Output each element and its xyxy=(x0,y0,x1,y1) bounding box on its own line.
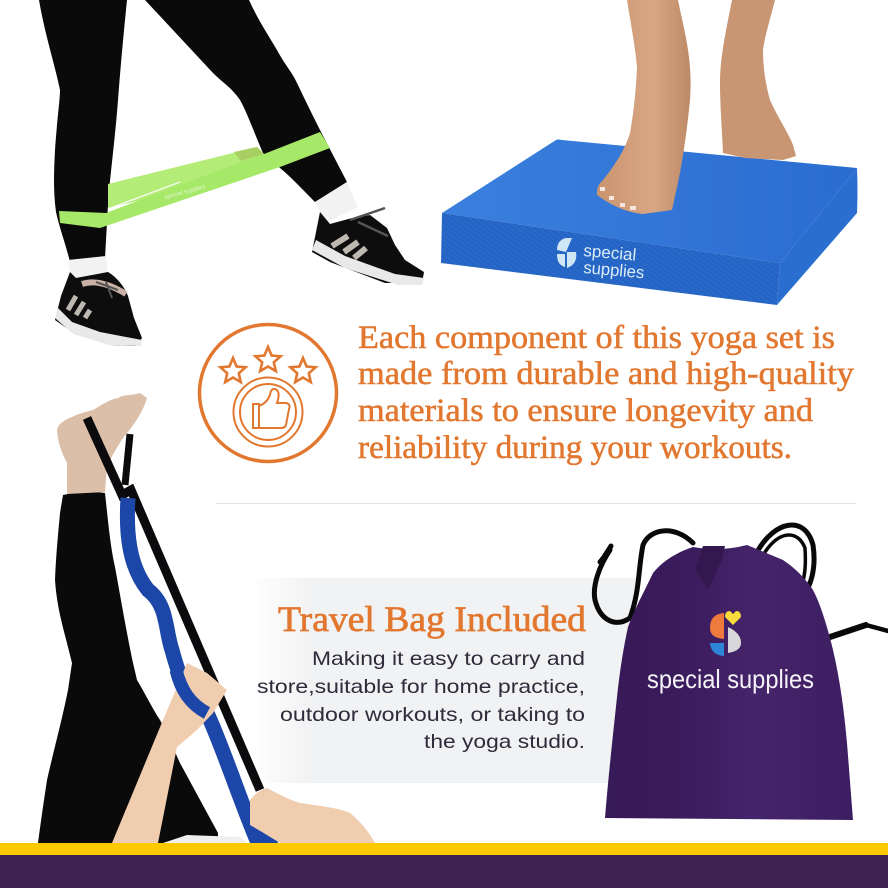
toenails xyxy=(600,189,636,208)
panel: travel bag xyxy=(250,578,636,783)
balance pad front xyxy=(441,213,780,305)
bag gather xyxy=(695,546,725,590)
photo: drawstring bag xyxy=(594,525,888,820)
green resistance band: special supplies xyxy=(164,184,206,201)
divider xyxy=(216,503,856,504)
back foot xyxy=(720,0,796,160)
icon: rating thumbs up xyxy=(200,324,336,462)
balance pad top xyxy=(442,140,857,263)
left sock xyxy=(68,256,108,284)
right shoe xyxy=(312,208,424,285)
blue strap xyxy=(127,498,278,842)
bag body xyxy=(605,545,853,820)
black strap xyxy=(87,418,260,790)
balance pad side xyxy=(777,168,858,305)
yellow stripe xyxy=(0,843,888,855)
text: durability statement: made from durable and high-quality xyxy=(358,356,855,392)
bag logo xyxy=(710,611,741,656)
green resistance band xyxy=(59,132,330,228)
bag brand text: special supplies xyxy=(647,664,814,694)
text: travel bag description: the yoga studio. xyxy=(424,731,585,753)
text: travel bag description: Making it easy to carry and xyxy=(312,648,585,670)
purple footer xyxy=(0,855,888,888)
right sock xyxy=(315,182,358,222)
photo: balance pad and feet xyxy=(441,0,858,305)
left legging xyxy=(39,0,127,263)
lower hand xyxy=(250,788,375,843)
text: travel bag description xyxy=(257,648,585,753)
text: durability statement: Each component of this yoga set is xyxy=(358,320,835,356)
text: durability statement: reliability during your workouts. xyxy=(358,430,792,466)
strap return xyxy=(125,434,130,485)
pad logo: supplies xyxy=(583,258,645,282)
text: travel bag description: outdoor workouts, or taking to xyxy=(280,704,585,726)
right legging xyxy=(145,0,347,202)
front foot xyxy=(597,0,691,214)
cords xyxy=(594,525,888,637)
photo: resistance band legs xyxy=(39,0,424,346)
raised leg xyxy=(38,492,218,843)
text: travel bag description: store,suitable for home practice, xyxy=(257,676,585,698)
heading: travel bag included: Travel Bag Included xyxy=(278,599,586,639)
photo: leg stretch with strap xyxy=(38,393,375,843)
pad logo xyxy=(557,238,645,282)
text: durability statement: materials to ensure longevity and xyxy=(358,393,814,429)
foot xyxy=(57,393,147,494)
pad logo: special xyxy=(583,241,637,265)
blue strap over hand xyxy=(176,670,207,713)
shirt xyxy=(163,835,247,843)
left shoe xyxy=(55,272,142,346)
arm xyxy=(112,663,227,843)
text: durability statement xyxy=(358,320,855,466)
